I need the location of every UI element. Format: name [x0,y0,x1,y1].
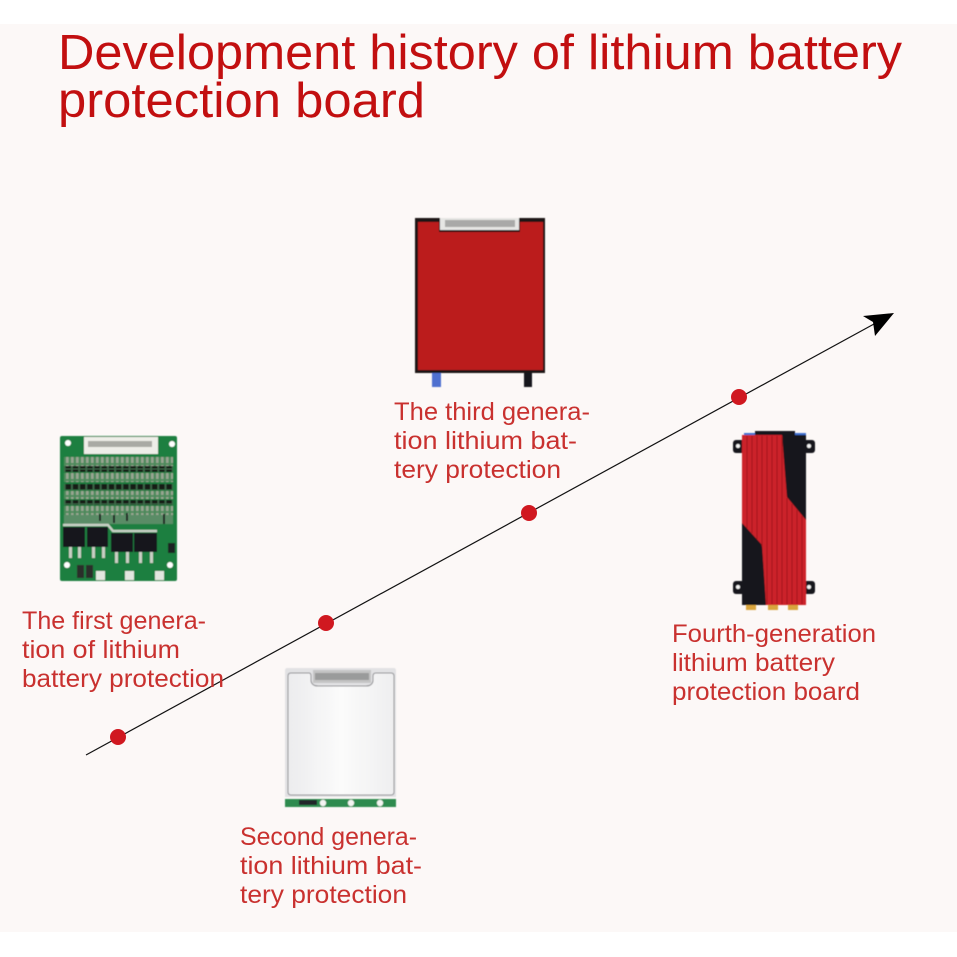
label: fourth generation: protection board [672,678,860,706]
title [58,26,903,128]
label: third generation: tery protection [394,456,561,484]
icon: first generation green circuit board [60,436,177,581]
label: third generation: The third genera- [394,398,590,426]
label: first generation: The first genera- [22,607,206,635]
label: second generation: tion lithium bat- [240,852,422,880]
title: Development history of lithium battery [58,26,903,80]
timeline marker: first generation [110,729,126,745]
label: fourth generation: Fourth-generation [672,620,876,648]
title: protection board [58,74,425,128]
label: second generation: tery protection [240,881,407,909]
label: second generation: Second genera- [240,823,417,851]
timeline marker: second generation [318,615,334,631]
timeline marker: third generation [521,505,537,521]
label: third generation [394,398,590,484]
icon: third generation red board [415,218,545,387]
label: first generation [22,607,224,693]
label: fourth generation [672,620,876,706]
label: fourth generation: lithium battery [672,649,836,677]
icon: second generation silver board [285,668,396,807]
label: first generation: battery protection [22,665,224,693]
timeline marker: fourth generation [731,389,747,405]
label: second generation [240,823,422,909]
icon: fourth generation red aluminium housing board [733,431,815,610]
label: first generation: tion of lithium [22,636,180,664]
timeline arrow [86,313,894,755]
label: third generation: tion lithium bat- [394,427,577,455]
